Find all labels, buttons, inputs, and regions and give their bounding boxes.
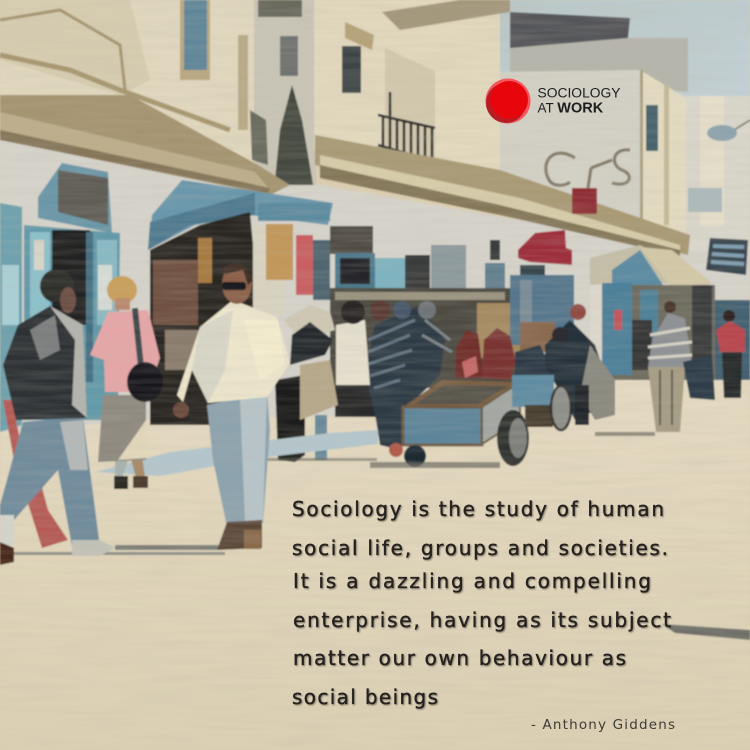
cart: large wooden cart (403, 380, 529, 467)
crowd: dark seated figures (515, 304, 615, 425)
ground (0, 376, 750, 750)
ledge: left (0, 95, 290, 195)
shopfront: left blue doors (0, 163, 120, 432)
building: tower (250, 0, 316, 190)
crowd: red-clad seated figures (455, 322, 555, 380)
sky (480, 0, 750, 110)
building: right facades (500, 12, 750, 300)
lower wall (0, 135, 750, 440)
quote text: matter our own behaviour as (293, 646, 626, 670)
quote text (292, 497, 671, 709)
cart: second cart (512, 375, 571, 430)
logo mark (486, 78, 530, 124)
sign letters (546, 150, 630, 188)
balcony (378, 92, 435, 162)
shop stalls: centre background (330, 275, 574, 417)
building: centre facade (314, 0, 510, 190)
building: left facade (0, 0, 256, 170)
figure: man in striped coat (365, 300, 452, 457)
logo wordmark: SOCIOLOGY (538, 86, 620, 100)
figure: man in white shirt (173, 263, 290, 550)
quote text: social life, groups and societies. (292, 536, 668, 560)
figure: woman in white with dark bundle (275, 300, 370, 462)
figure: woman in pink (90, 276, 163, 489)
quote text: It is a dazzling and compelling (293, 569, 651, 593)
shop: right blue door and awning (590, 245, 750, 380)
red sign (518, 188, 597, 275)
quote text: Sociology is the study of human (292, 497, 664, 521)
quote text: social beings (292, 685, 438, 709)
logo wordmark (538, 86, 620, 116)
ledge: right (315, 135, 690, 256)
figure: man in striped jumper (648, 301, 692, 432)
attribution: - Anthony Giddens (531, 717, 675, 733)
hanging sign (706, 238, 748, 275)
road shadows and highlights (0, 430, 750, 640)
figure: man in red (683, 310, 745, 400)
shopfront: awning and interior (148, 180, 505, 425)
quote text: enterprise, having as its subject (293, 608, 671, 632)
logo: Sociology at Work (486, 78, 620, 124)
logo wordmark: AT WORK (538, 100, 604, 116)
figure: man in dark jacket (0, 269, 115, 565)
